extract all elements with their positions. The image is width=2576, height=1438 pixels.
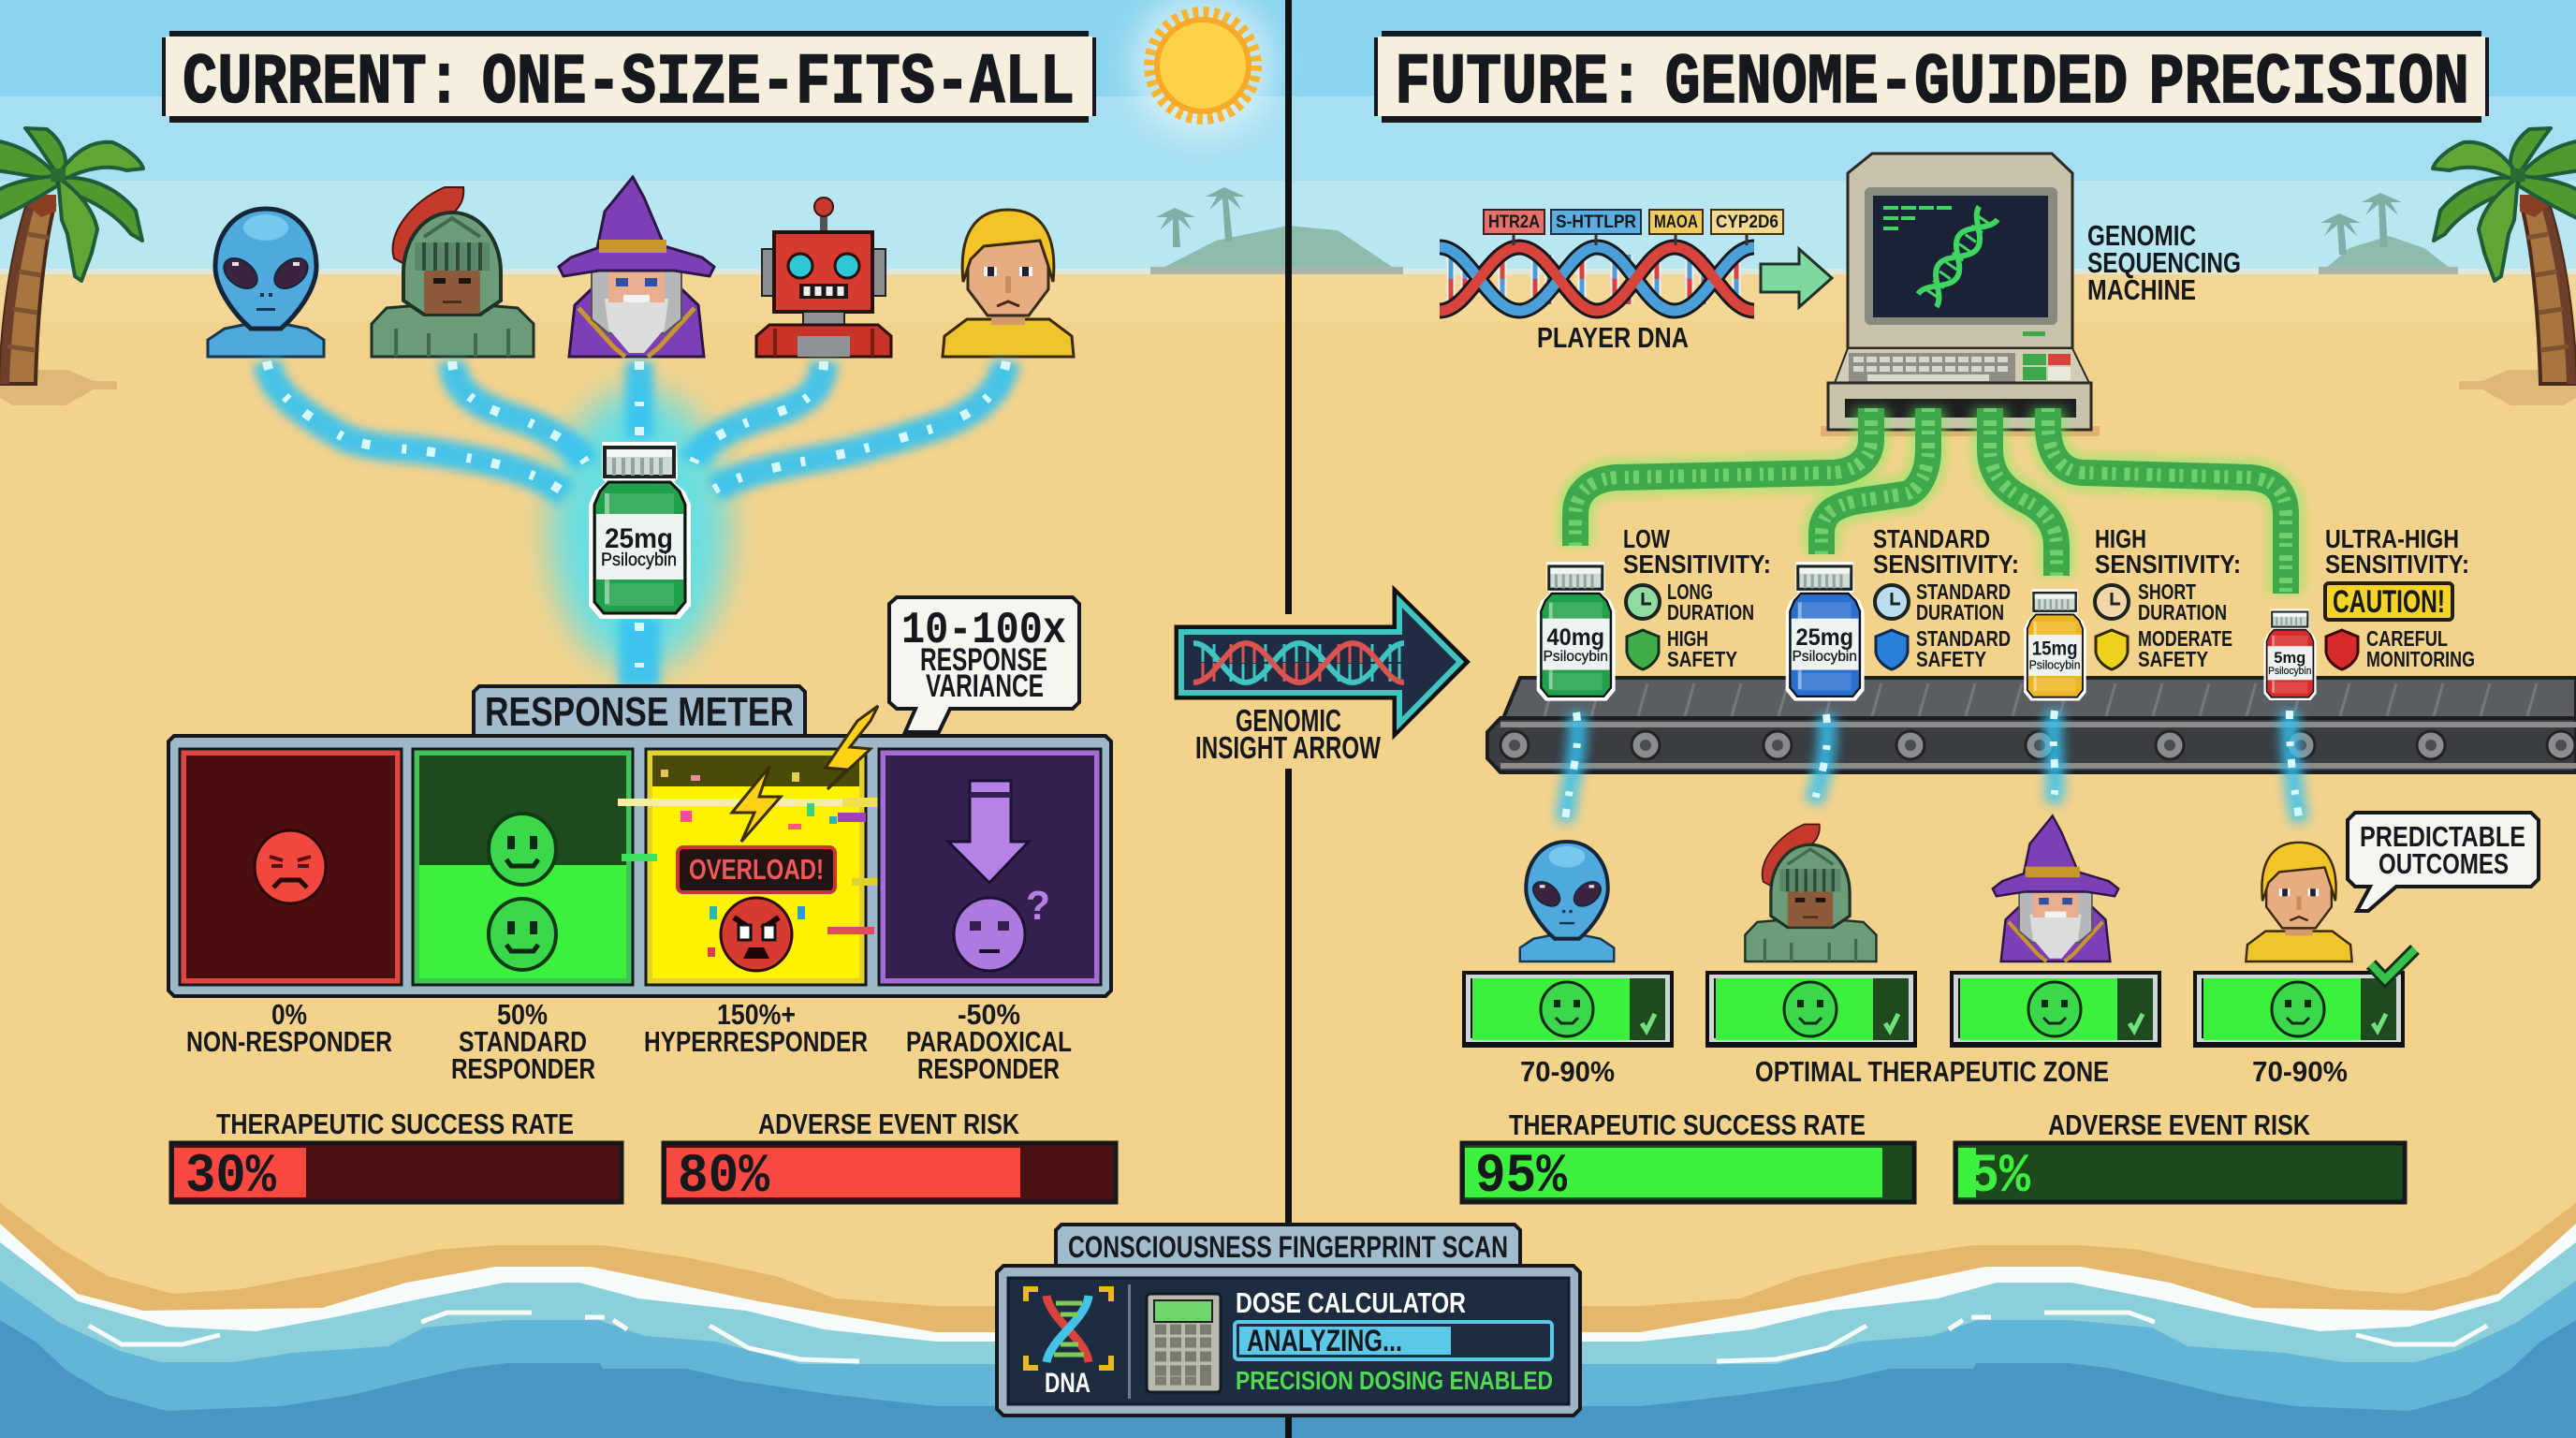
human — [943, 210, 1074, 357]
response meter panel — [168, 706, 1111, 996]
responder labels: 150%+ — [717, 998, 796, 1031]
palm tree left — [0, 128, 143, 405]
label: genomic sequencing machine: SEQUENCING — [2087, 246, 2241, 279]
metric: current adverse event: 80% — [678, 1147, 769, 1208]
low sensitivity legend: LOW — [1623, 524, 1670, 553]
arrow: genomic insight — [1178, 593, 1466, 732]
standard sensitivity legend: STANDARD — [1916, 626, 2011, 651]
responder labels — [186, 998, 1072, 1085]
low sensitivity legend — [1623, 524, 1771, 671]
label: player dna: PLAYER DNA — [1537, 321, 1689, 354]
metric: future therapeutic success: 95% — [1475, 1147, 1567, 1208]
conveyor belt — [1487, 678, 2576, 772]
standard sensitivity legend: DURATION — [1916, 600, 2004, 624]
responder labels: 0% — [271, 998, 307, 1031]
gene tags: S-HTTLPR — [1556, 213, 1636, 232]
bottle 5mg red — [2263, 609, 2317, 700]
high sensitivity legend: HIGH — [2095, 524, 2146, 553]
ultra-high sensitivity legend: MONITORING — [2366, 647, 2475, 671]
ultra-high sensitivity legend — [2325, 524, 2475, 671]
status: precision dosing enabled: PRECISION DOSING ENABLED — [1236, 1366, 1553, 1395]
bottle 15mg yellow: 15mg — [2032, 638, 2078, 659]
meter 3 — [1950, 971, 2161, 1048]
wizard — [559, 177, 714, 357]
icon: calculator — [1147, 1294, 1221, 1392]
cell: paradoxical responder: ? — [1026, 883, 1050, 929]
high sensitivity legend: SAFETY — [2138, 647, 2208, 671]
bottle 15mg yellow: Psilocybin — [2029, 657, 2081, 671]
responder labels: STANDARD — [459, 1025, 587, 1058]
metric: future therapeutic success — [1462, 1108, 1914, 1208]
standard sensitivity legend: SENSITIVITY: — [1873, 550, 2019, 579]
meter 2 — [1705, 971, 1917, 1048]
cell: standard responder — [413, 749, 633, 985]
callout: response variance: VARIANCE — [926, 668, 1044, 704]
responder labels: -50% — [958, 998, 1020, 1031]
blue delivery streams — [1565, 711, 2300, 822]
high sensitivity legend: DURATION — [2138, 600, 2227, 624]
low sensitivity legend: SAFETY — [1667, 647, 1737, 671]
wizard — [1993, 815, 2118, 961]
low sensitivity legend: DURATION — [1667, 600, 1754, 624]
standard sensitivity legend: STANDARD — [1873, 524, 1990, 553]
cell: hyperresponder — [618, 749, 904, 985]
metric: future adverse event: 5% — [1969, 1147, 2030, 1208]
callout: predictable outcomes: PREDICTABLE — [2360, 820, 2525, 853]
beach shoreline — [0, 1203, 2576, 1438]
responder labels: 50% — [497, 998, 548, 1031]
responder labels: RESPONDER — [451, 1052, 595, 1085]
responder labels: PARADOXICAL — [906, 1025, 1072, 1058]
main bottle 25mg: Psilocybin — [601, 550, 677, 570]
robot — [756, 198, 891, 357]
dose calculator panel — [997, 1266, 1580, 1416]
label: genomic sequencing machine: GENOMIC — [2087, 219, 2196, 252]
metric: current therapeutic success: 30% — [185, 1147, 276, 1208]
progress bar — [1235, 1322, 1552, 1359]
metric: current therapeutic success: THERAPEUTIC SUCCESS RATE — [216, 1108, 574, 1140]
knight — [372, 187, 534, 357]
high sensitivity legend: SENSITIVITY: — [2095, 550, 2241, 579]
main bottle 25mg — [589, 442, 691, 619]
gene tags — [1484, 210, 1783, 245]
callout: predictable outcomes — [2348, 813, 2539, 911]
cell: hyperresponder: OVERLOAD! — [689, 853, 824, 886]
icon: check highlight — [2371, 949, 2415, 979]
metric: current therapeutic success — [171, 1108, 622, 1208]
standard sensitivity legend — [1873, 524, 2019, 671]
alien — [208, 209, 324, 357]
title: current: CURRENT: ONE-SIZE-FITS-ALL — [183, 43, 1075, 124]
distant island centre — [1150, 187, 1403, 274]
metric: future adverse event: ADVERSE EVENT RISK — [2048, 1108, 2310, 1141]
progress bar: ANALYZING... — [1247, 1324, 1402, 1357]
label: genomic insight arrow: INSIGHT ARROW — [1195, 730, 1382, 765]
bottle 5mg red: Psilocybin — [2268, 666, 2311, 677]
energy streams into single dose — [267, 361, 1006, 688]
gene tags: CYP2D6 — [1716, 213, 1778, 232]
meter labels: 70-90% — [2252, 1055, 2348, 1088]
standard sensitivity legend: SAFETY — [1916, 647, 1986, 671]
icon: big check — [2371, 949, 2415, 979]
meter labels: OPTIMAL THERAPEUTIC ZONE — [1755, 1055, 2109, 1088]
callout: response variance: 10-100x — [901, 606, 1066, 656]
bottle 40mg — [1537, 562, 1616, 701]
distant island right — [2319, 193, 2458, 274]
ultra-high sensitivity legend: SENSITIVITY: — [2325, 550, 2469, 579]
responder labels: RESPONDER — [917, 1052, 1060, 1085]
player dna helix — [1440, 247, 1754, 311]
main bottle 25mg: 25mg — [605, 523, 673, 554]
response meter tab: RESPONSE METER — [485, 689, 794, 735]
label: genomic sequencing machine: MACHINE — [2087, 273, 2196, 306]
metric: future adverse event — [1955, 1108, 2405, 1208]
gene tags: HTR2A — [1488, 213, 1540, 232]
label: dose calculator: DOSE CALCULATOR — [1236, 1286, 1466, 1319]
low sensitivity legend: LONG — [1667, 580, 1713, 604]
bottle 40mg: 40mg — [1546, 624, 1604, 651]
consciousness fingerprint tab — [1056, 1225, 1520, 1266]
knight — [1745, 824, 1876, 961]
label: dna: DNA — [1045, 1368, 1090, 1399]
characters: future row — [1520, 815, 2352, 961]
ultra-high sensitivity legend: CAREFUL — [2366, 626, 2448, 651]
icon: dna scan — [1026, 1289, 1111, 1368]
low sensitivity legend: HIGH — [1667, 626, 1708, 651]
centre divider — [1285, 0, 1292, 1438]
callout: predictable outcomes: OUTCOMES — [2378, 847, 2509, 880]
high sensitivity legend — [2095, 524, 2241, 671]
genomic sequencing machine — [1821, 154, 2100, 436]
human — [2246, 843, 2352, 961]
icon: sun — [1132, 0, 1274, 137]
meter 1 — [1462, 971, 1674, 1048]
bottle 25mg blue: 25mg — [1795, 624, 1853, 651]
responder labels: NON-RESPONDER — [186, 1025, 392, 1058]
bottle 40mg: Psilocybin — [1544, 649, 1608, 665]
optimal zone meters — [1462, 949, 2415, 1048]
bottle 15mg yellow — [2024, 589, 2086, 700]
consciousness fingerprint tab: CONSCIOUSNESS FINGERPRINT SCAN — [1068, 1230, 1508, 1264]
high sensitivity legend: SHORT — [2138, 580, 2196, 604]
label: genomic insight arrow — [1195, 703, 1382, 765]
palm tree right — [2433, 128, 2576, 405]
metric: future therapeutic success: THERAPEUTIC SUCCESS RATE — [1509, 1108, 1866, 1141]
high sensitivity legend: MODERATE — [2138, 626, 2232, 651]
ultra-high sensitivity legend: CAUTION! — [2333, 584, 2445, 620]
bottle 25mg blue: Psilocybin — [1793, 649, 1857, 665]
metric: current adverse event — [664, 1108, 1116, 1208]
label: genomic sequencing machine — [2087, 219, 2241, 306]
low sensitivity legend: SENSITIVITY: — [1623, 550, 1771, 579]
bottle 25mg blue — [1786, 562, 1865, 701]
cell: non-responder — [180, 749, 402, 985]
alien — [1520, 842, 1614, 961]
standard sensitivity legend: STANDARD — [1916, 580, 2011, 604]
arrow: dna to sequencer — [1761, 249, 1832, 307]
responder labels: HYPERRESPONDER — [644, 1025, 868, 1058]
bottle 5mg red: 5mg — [2274, 649, 2305, 667]
ultra-high sensitivity legend: ULTRA-HIGH — [2325, 524, 2459, 553]
icon: lightning bolt — [826, 706, 878, 789]
green data streams from machine to bottles — [1575, 408, 2286, 594]
meter 4 — [2193, 971, 2405, 1048]
meter labels — [1520, 1055, 2348, 1088]
metric: current adverse event: ADVERSE EVENT RISK — [758, 1108, 1019, 1140]
label: genomic insight arrow: GENOMIC — [1236, 703, 1341, 738]
callout: response variance — [889, 597, 1079, 732]
callout: response variance: RESPONSE — [920, 642, 1047, 678]
characters: current row — [208, 177, 1074, 357]
cell: paradoxical responder — [879, 749, 1101, 985]
gene tags: MAOA — [1654, 213, 1698, 232]
meter labels: 70-90% — [1520, 1055, 1615, 1088]
